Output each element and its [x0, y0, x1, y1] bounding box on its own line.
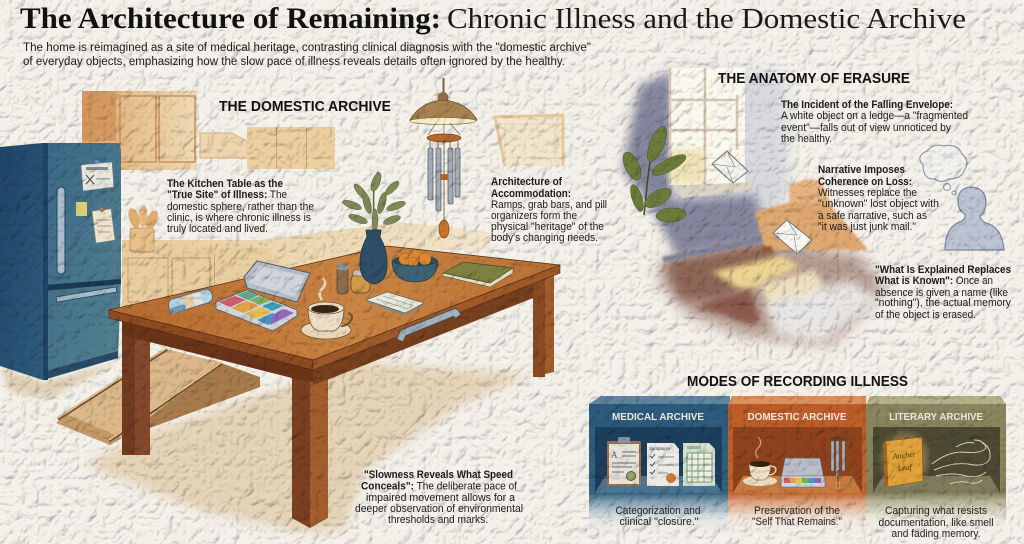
label: literary archive: LITERARY ARCHIVE	[889, 411, 983, 423]
houseplant	[619, 124, 689, 223]
text: narrative imposes coherence: Coherence on Loss:	[818, 176, 912, 188]
armchair	[755, 179, 868, 252]
text: what is explained	[875, 264, 1011, 321]
text: architecture of accommodation: Accommodation:	[491, 188, 571, 200]
text: narrative imposes coherence: a safe narrative, such as	[818, 210, 927, 222]
text: falling envelope: the healthy.	[781, 133, 832, 145]
text: falling envelope: The Incident of the Falling Envelope:	[781, 99, 953, 111]
window	[670, 68, 752, 198]
caption: medical archive: Categorization and	[616, 505, 700, 517]
vase with plant	[341, 171, 407, 284]
caption: literary archive	[878, 505, 994, 540]
icon: clipboard	[607, 437, 641, 486]
subtitle	[23, 42, 591, 68]
title	[20, 2, 966, 35]
fridge front	[43, 143, 121, 380]
text: architecture of accommodation: physical "heritage" of the	[491, 221, 604, 233]
text: narrative imposes coherence: "unknown" lost object with	[818, 198, 939, 210]
floor with shadows	[0, 360, 530, 532]
caption: domestic archive	[752, 505, 842, 528]
fridge side	[0, 143, 43, 380]
text: falling envelope	[781, 99, 968, 145]
text: falling envelope: A white object on a ledge—a "fragmented	[781, 110, 968, 122]
lower cabinets and counter	[122, 222, 490, 312]
text: kitchen table: "True Site" of Illness: The	[167, 189, 287, 201]
text: kitchen table: clinic, is where chronic illness is	[167, 212, 311, 224]
text: kitchen table: domestic sphere, rather than the	[167, 201, 314, 213]
text: architecture of accommodation: body's changing needs.	[491, 232, 598, 244]
icon: wind lines	[932, 440, 990, 484]
paper note	[92, 208, 115, 243]
caption: literary archive: and fading memory.	[892, 528, 980, 540]
text: what is explained: "nothing"), the actual memory	[875, 297, 1011, 309]
panel: domestic archive	[728, 396, 867, 539]
upper cabinets	[82, 91, 335, 170]
caption: literary archive: documentation, like smell	[878, 517, 994, 529]
text: slowness reveals: deeper observation of environmental	[355, 503, 523, 515]
fridge handles	[57, 187, 65, 274]
panel: medical archive	[589, 396, 730, 539]
modes of recording illness shelf	[589, 396, 1006, 539]
grab bar	[400, 312, 458, 340]
silhouette	[945, 187, 1004, 250]
text: narrative imposes coherence	[818, 164, 939, 233]
table top	[109, 246, 560, 360]
heading: the anatomy of erasure: THE ANATOMY OF ERASURE	[718, 71, 910, 87]
chime tubes	[428, 148, 460, 211]
bowl of fruit	[392, 250, 438, 282]
heading: the domestic archive: THE DOMESTIC ARCHIVE	[219, 99, 391, 115]
chime pendant	[439, 220, 449, 238]
dining table	[109, 171, 560, 528]
icon: spreadsheet	[683, 443, 715, 486]
label: domestic archive: DOMESTIC ARCHIVE	[748, 411, 846, 423]
icon: wind chimes	[829, 437, 847, 488]
title: Chronic Illness and the Domestic Archive	[447, 4, 966, 35]
text: what is explained: "What Is Explained Replaces	[875, 264, 1011, 276]
subtitle: of everyday objects, emphasizing how the slow pace of illness reveals details often ignored by the healthy.	[23, 56, 565, 68]
icon: glowing book: Ancher	[891, 450, 917, 461]
pendant lamp with wind chimes	[410, 78, 477, 238]
heading: modes of recording illness: MODES OF RECORDING ILLNESS	[687, 374, 908, 390]
icon: checklist	[647, 443, 679, 486]
text: narrative imposes coherence: Narrative Imposes	[818, 164, 905, 176]
book	[443, 262, 513, 287]
floor wash	[660, 235, 885, 345]
text: kitchen table: truly located and lived.	[167, 223, 268, 235]
spice jars	[337, 263, 370, 294]
kitchen background illustration	[82, 91, 563, 312]
icon: glowing book	[883, 437, 923, 487]
icon: coffee cup	[743, 437, 777, 486]
text: narrative imposes coherence: "it was just junk mail."	[818, 221, 916, 233]
icon: glowing book: Leaf	[896, 462, 914, 473]
text: slowness reveals	[355, 469, 523, 526]
sticky note	[76, 202, 87, 216]
thought cloud	[920, 145, 967, 195]
text: architecture of accommodation: Ramps, grab bars, and pill	[491, 199, 607, 211]
anatomy of erasure scene	[619, 68, 1004, 345]
small pill case	[167, 288, 214, 314]
text: what is explained: of the object is erased.	[875, 309, 976, 321]
table aprons	[122, 318, 313, 382]
text: architecture of accommodation: Architecture of	[491, 176, 562, 188]
caption: literary archive: Capturing what resists	[885, 505, 987, 517]
wall picture patch	[495, 115, 563, 166]
text: what is explained: What is Known": Once an	[875, 275, 993, 287]
subtitle: The home is reimagined as a site of medical heritage, contrasting clinical diagnosis with the "domestic archive"	[23, 42, 591, 54]
wall wash	[670, 70, 790, 250]
caption: medical archive: clinical "closure."	[620, 516, 699, 528]
caption: domestic archive: Preservation of the	[754, 505, 840, 517]
text: kitchen table	[167, 178, 314, 235]
text: slowness reveals: impaired movement allows for a	[366, 492, 516, 504]
text: slowness reveals: thresholds and marks.	[388, 514, 488, 526]
text: slowness reveals: "Slowness Reveals What Speed	[364, 469, 513, 481]
text: falling envelope: event"—falls out of view unnoticed by	[781, 122, 951, 134]
panel: literary archive	[866, 396, 1006, 539]
label: medical archive: MEDICAL ARCHIVE	[612, 411, 704, 423]
icon: clipboard: A	[611, 450, 618, 460]
icon: pill box	[781, 458, 825, 487]
prescription note	[81, 160, 114, 191]
text: slowness reveals: Conceals": The deliberate pace of	[361, 480, 518, 492]
coffee cup with saucer	[301, 278, 352, 339]
pill organizer	[216, 261, 310, 331]
ramp boards under table	[56, 348, 260, 445]
text: architecture of accommodation	[491, 176, 607, 244]
title: The Architecture of Remaining:	[20, 2, 441, 35]
caption: medical archive	[616, 505, 700, 528]
text: what is explained: absence is given a name (like	[875, 287, 1008, 299]
text: kitchen table: The Kitchen Table as the	[167, 178, 283, 190]
refrigerator	[0, 143, 121, 380]
caption: domestic archive: "Self That Remains."	[752, 516, 842, 528]
notepad	[366, 292, 424, 316]
table legs	[122, 264, 554, 528]
icon: checklist: Symptoms	[649, 446, 671, 451]
text: architecture of accommodation: organizers form the	[491, 210, 577, 222]
chime disk	[427, 134, 461, 142]
utensil holder	[126, 205, 160, 252]
text: narrative imposes coherence: Witnesses replace the	[818, 187, 917, 199]
lamp shade	[410, 78, 477, 135]
envelope falling low	[773, 220, 812, 254]
envelope falling high	[712, 151, 748, 183]
